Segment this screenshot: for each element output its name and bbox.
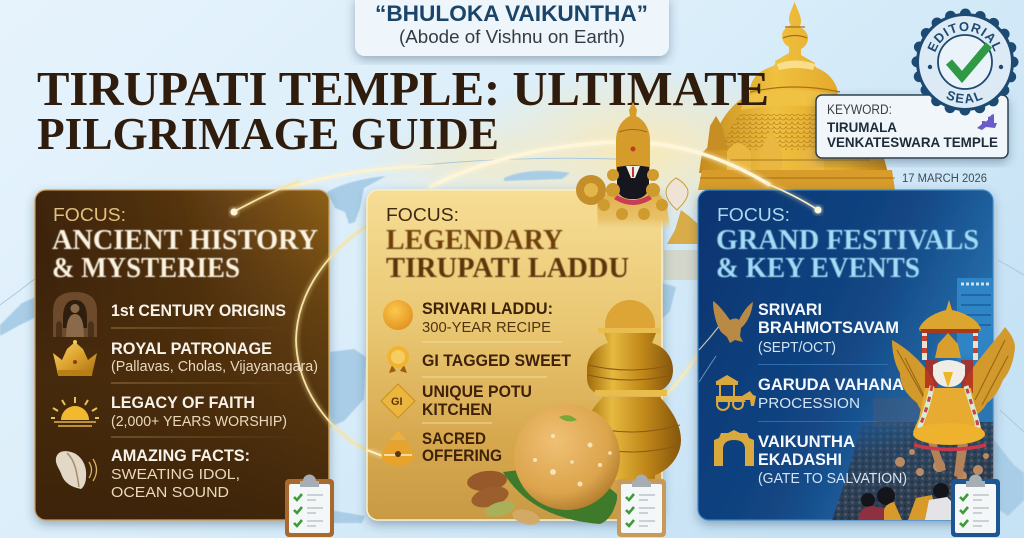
nuts xyxy=(466,469,541,527)
list items: GARUDA VAHANA xyxy=(758,376,904,394)
focus label: FOCUS: xyxy=(717,205,790,225)
editorial seal: SEAL xyxy=(946,91,983,104)
gopuram tower xyxy=(957,278,993,373)
panel: grand festivals xyxy=(698,183,1015,520)
list items xyxy=(758,301,907,487)
icon: eagle xyxy=(713,301,753,343)
list items: 1st CENTURY ORIGINS xyxy=(111,302,286,320)
list items: UNIQUE POTU xyxy=(422,383,532,401)
icon: gate xyxy=(714,430,754,466)
icon: crown xyxy=(53,340,97,376)
date: 17 MARCH 2026 xyxy=(902,173,987,185)
icon: GI tag xyxy=(381,384,415,418)
small temple statue between cards xyxy=(664,210,698,280)
glow arc end xyxy=(367,450,385,457)
deity figure xyxy=(576,102,688,230)
list items: LEGACY OF FAITH xyxy=(111,394,255,412)
panel heading xyxy=(386,225,629,284)
list items: VAIKUNTHA xyxy=(758,433,855,451)
icon: chart book xyxy=(977,114,997,130)
list items: (SEPT/OCT) xyxy=(758,339,836,356)
keyword box: VENKATESWARA TEMPLE xyxy=(827,134,998,150)
glow line and node xyxy=(699,183,822,382)
panel: tirupati laddu xyxy=(367,190,681,527)
icon: GI tag: GI xyxy=(391,396,403,408)
panel heading: GRAND FESTIVALS xyxy=(716,225,979,256)
panel heading: LEGENDARY xyxy=(386,225,563,256)
panel heading xyxy=(52,225,318,284)
heading: top badge: “BHULOKA VAIKUNTHA” xyxy=(375,1,648,26)
list items: AMAZING FACTS: xyxy=(111,447,250,465)
laddu xyxy=(514,404,620,510)
clipboard icons xyxy=(285,474,1000,537)
list items: SRIVARI xyxy=(758,301,822,319)
garuda statue xyxy=(892,300,1015,450)
brass pot with laddu xyxy=(582,300,681,480)
crowd photograph xyxy=(832,398,993,520)
list items: EKADASHI xyxy=(758,451,842,469)
icon: sacred pot xyxy=(382,431,414,465)
temple dome xyxy=(698,1,895,190)
heading: top badge xyxy=(355,0,669,56)
editorial seal xyxy=(912,8,1018,116)
list items: SRIVARI LADDU: xyxy=(422,300,553,318)
list items: OCEAN SOUND xyxy=(111,484,229,501)
keyword box: KEYWORD: xyxy=(827,102,892,117)
panel heading xyxy=(716,225,979,284)
icon: laddu xyxy=(383,300,413,330)
title: TIRUPATI TEMPLE: ULTIMATE xyxy=(37,61,769,116)
focus label: FOCUS: xyxy=(386,205,459,225)
list items: GI TAGGED SWEET xyxy=(422,352,571,370)
banana leaf xyxy=(503,470,618,524)
list items: ROYAL PATRONAGE xyxy=(111,340,272,358)
editorial seal: EDITORIAL xyxy=(927,22,1000,52)
panel heading: ANCIENT HISTORY xyxy=(52,225,318,256)
icon: sun xyxy=(51,397,99,426)
icon: temple carving xyxy=(53,292,97,337)
panel: ancient history xyxy=(35,181,370,520)
list items: (2,000+ YEARS WORSHIP) xyxy=(111,413,287,430)
list items: OFFERING xyxy=(422,447,502,465)
panel heading: & KEY EVENTS xyxy=(716,253,920,284)
keyword box xyxy=(816,95,1008,158)
list items: PROCESSION xyxy=(758,395,860,412)
glow arc over panel xyxy=(233,181,370,452)
icon: medal xyxy=(387,346,409,373)
list items: SWEATING IDOL, xyxy=(111,466,240,483)
list items: KITCHEN xyxy=(422,401,492,419)
clipboard: history xyxy=(285,474,334,537)
title: PILGRIMAGE GUIDE xyxy=(37,108,499,159)
golden light arcs xyxy=(233,142,770,400)
panel heading: TIRUPATI LADDU xyxy=(386,253,629,284)
clipboard: festivals xyxy=(951,474,1000,537)
keyword box: TIRUMALA xyxy=(827,119,897,135)
panel heading: & MYSTERIES xyxy=(52,253,240,284)
clipboard: laddu xyxy=(617,474,666,537)
check mark xyxy=(949,45,989,77)
icon: conch xyxy=(56,451,96,489)
list items xyxy=(422,300,571,465)
glow node xyxy=(230,208,238,216)
list items: 300-YEAR RECIPE xyxy=(422,319,551,336)
list items: SACRED xyxy=(422,430,486,448)
icon: chariot xyxy=(715,375,756,410)
list items xyxy=(111,302,318,501)
list items: (GATE TO SALVATION) xyxy=(758,470,907,487)
list items: (Pallavas, Cholas, Vijayanagara) xyxy=(111,358,318,375)
focus label: FOCUS: xyxy=(53,205,126,225)
title xyxy=(37,61,769,159)
heading: top badge: (Abode of Vishnu on Earth) xyxy=(399,26,625,47)
list items: BRAHMOTSAVAM xyxy=(758,319,899,337)
